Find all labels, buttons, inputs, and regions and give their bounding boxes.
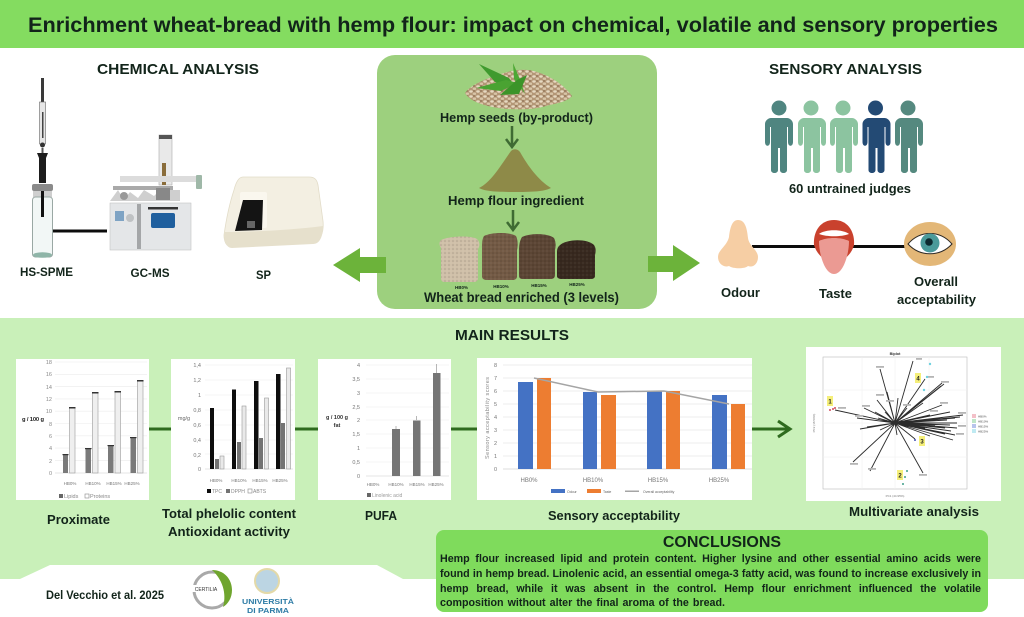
chart: sensory acceptability: Overall acceptability [643,490,675,494]
chart: proximate: 2 [49,459,52,465]
chart: total phenolic content and antioxidant activity: mg/g [178,416,190,422]
chart: proximate: HB10% [85,481,101,486]
connectors between charts [149,421,790,437]
label: multivariate analysis: Multivariate analysis [849,505,979,519]
bread: HB25% [557,240,596,287]
chart: PUFA linolenic acid: HB10% [388,482,404,487]
biplot cluster labels: 1 [828,400,832,406]
logo: Università di Parma: UNIVERSITÀ [242,597,294,606]
chart: proximate: 8 [49,422,52,428]
chart: total phenolic content and antioxidant activity: HB15% [252,478,268,483]
label: hemp seeds: Hemp seeds (by-product) [440,110,593,125]
chart: proximate: 0 [49,471,52,477]
chart: sensory acceptability [477,358,752,500]
chart: proximate: 18 [46,360,52,366]
chart: proximate: Proteins [90,494,110,500]
heading: chemical analysis: CHEMICAL ANALYSIS [97,61,259,78]
arrow: seeds to flour [506,126,518,147]
chart: proximate: 16 [46,372,52,378]
chart: sensory acceptability: 1 [494,454,497,460]
chart: sensory acceptability: 2 [494,441,497,447]
chart: PUFA linolenic acid: 1,5 [352,432,360,438]
chart: proximate: HB15% [106,481,122,486]
bread: HB15%: HB15% [531,283,547,288]
chart: total phenolic content and antioxidant activity: 0,2 [193,453,201,459]
chart: multivariate biplot: Biplot [890,352,901,356]
icon: GC-MS instrument [110,135,202,250]
label: proximate: Proximate [47,513,110,527]
heading: main results: MAIN RESULTS [455,327,569,344]
chart: total phenolic content and antioxidant activity: 0 [198,467,201,473]
biplot legend: HB25% [978,430,989,434]
title banner: Enrichment wheat-bread with hemp flour: impact on chemical, volatile and sensory properties [28,14,998,37]
chart: multivariate biplot: PC2 (18.50%) [812,414,816,432]
connector: vial to GC-MS [53,230,107,232]
label: overall acceptability [897,275,976,307]
panel: conclusions [436,530,988,612]
arrow: flour to bread [507,210,519,230]
label: odour: Odour [721,286,760,300]
chart: total phenolic content and antioxidant activity: 0,4 [193,438,201,444]
logo: research group [191,570,232,608]
chart: PUFA linolenic acid: 3,5 [352,377,360,383]
panel: conclusions: hemp bread, while it was absent in the control. Hemp flour enrichment influenced the volatile [440,583,981,595]
chart: PUFA linolenic acid: 0 [357,474,360,480]
chart: PUFA linolenic acid: 2,5 [352,405,360,411]
chart: PUFA linolenic acid: 1 [357,446,360,452]
label: sensory acceptability: Sensory acceptability [548,509,680,523]
label: total phenolic content and antioxidant activity: Total phelolic content [162,507,297,521]
bread: HB10%: HB10% [493,284,509,289]
chart: total phenolic content and antioxidant activity: DPPH [231,489,245,495]
chart: proximate: 14 [46,385,52,391]
chart: proximate: 10 [46,409,52,415]
chart: total phenolic content and antioxidant activity: HB25% [272,478,288,483]
chart: PUFA linolenic acid: Linolenic acid [372,493,403,499]
label: PUFA: PUFA [365,509,397,523]
icon: nose [718,220,758,268]
label: SP: SP [256,268,271,282]
panel: conclusions: composition without alter the final aroma of the bread. [440,597,725,609]
biplot cluster labels: 2 [898,474,902,480]
chart: sensory acceptability: Odour [567,490,578,494]
logo: Università di Parma: DI PARMA [247,608,289,615]
chart: PUFA linolenic acid: HB25% [428,482,444,487]
icon: spectrophotometer [224,177,323,248]
arrow: right to sensory analysis [648,245,700,281]
chart: PUFA linolenic acid: 3 [357,391,360,397]
biplot cluster labels [827,373,925,480]
bread: HB0%: HB0% [455,285,468,290]
chart: sensory acceptability: 4 [494,415,497,421]
icon: HS-SPME vial and syringe [32,78,53,258]
biplot legend: HB10% [978,420,989,424]
icon: hemp seeds and leaves [465,63,572,109]
panel: hemp ingredient flow [377,55,657,309]
label: overall acceptability: Overall [914,275,958,289]
citation: Del Vecchio et al. 2025 [46,590,165,602]
biplot legend [972,414,989,434]
biplot cluster labels: 4 [916,376,920,382]
chart: total phenolic content and antioxidant activity: 0,8 [193,408,201,414]
biplot legend: HB15% [978,424,989,428]
chart: PUFA linolenic acid: HB15% [409,482,425,487]
chart: total phenolic content and antioxidant activity: HB10% [231,478,247,483]
chart: sensory acceptability: HB15% [648,478,669,484]
panel: conclusions: CONCLUSIONS [663,534,781,551]
bread: HB10% [482,233,518,289]
chart: proximate: HB0% [64,481,76,486]
chart: PUFA linolenic acid: fat [334,423,341,429]
biplot legend: HB0% [978,414,987,418]
logo: research group: CERTILIA [195,587,218,593]
biplot cluster labels: 3 [920,440,924,446]
chart: PUFA linolenic acid: 0,5 [352,460,360,466]
chart: sensory acceptability: 6 [494,389,497,395]
chart: total phenolic content and antioxidant activity: 1,4 [193,363,201,369]
chart: total phenolic content and antioxidant activity: TPC [212,489,222,495]
chart: total phenolic content and antioxidant activity: ABTS [253,489,267,495]
label: GC-MS: GC-MS [130,266,170,280]
chart: sensory acceptability: 3 [494,428,497,434]
chart: sensory acceptability: Sensory acceptability scores [485,377,491,459]
chart: sensory acceptability: 0 [494,467,497,473]
bread: HB25%: HB25% [569,282,585,287]
chart: sensory acceptability: 7 [494,376,497,382]
chart: proximate: 4 [49,446,52,452]
label: total phenolic content and antioxidant activity [162,507,297,539]
icon: five judges [765,100,923,173]
chart: sensory acceptability: HB10% [583,478,604,484]
chart: sensory acceptability: 5 [494,402,497,408]
label: 60 untrained judges: 60 untrained judges [789,182,911,196]
panel: conclusions: found in hemp bread. Linolenic acid, an essential omega-3 fatty acid, was found to increase exclusively in [440,568,981,580]
bread: HB15% [519,234,556,288]
chart: PUFA linolenic acid: 4 [357,363,360,369]
chart: multivariate biplot: PC1 (44.95%) [886,494,904,498]
chart: sensory acceptability: 8 [494,363,497,369]
chart: proximate: g / 100 g [22,417,44,423]
chart: multivariate biplot [806,347,1001,501]
chart: total phenolic content and antioxidant activity: 0,6 [193,423,201,429]
chart: total phenolic content and antioxidant activity: 1 [198,393,201,399]
chart: proximate: HB25% [124,481,140,486]
chart: PUFA linolenic acid: HB0% [367,482,379,487]
chart: total phenolic content and antioxidant activity: HB0% [210,478,222,483]
label: hemp flour: Hemp flour ingredient [448,193,585,208]
icon: mouth and tongue [814,220,854,274]
connector: senses line [752,245,908,248]
chart: proximate: Lipids [64,494,79,500]
bread: HB0% [440,236,479,290]
chart: proximate: 12 [46,397,52,403]
chart: sensory acceptability: Taste [603,490,611,494]
label: total phenolic content and antioxidant activity: Antioxidant activity [168,525,290,539]
heading: sensory analysis: SENSORY ANALYSIS [769,61,922,78]
logo: Università di Parma [242,569,294,615]
chart: PUFA linolenic acid: 2 [357,418,360,424]
icon: flour pile [479,149,551,192]
chart: total phenolic content and antioxidant activity: 1,2 [193,378,201,384]
chart: proximate [16,359,149,500]
chart: proximate: 6 [49,434,52,440]
label: wheat bread: Wheat bread enriched (3 levels) [424,290,619,305]
chart: PUFA linolenic acid [318,359,451,500]
arrow: left to chemical analysis [333,248,386,282]
label: taste: Taste [819,287,852,301]
chart: total phenolic content and antioxidant activity [171,359,295,500]
chart: PUFA linolenic acid: g / 100 g [326,415,348,421]
label: HS-SPME: HS-SPME [20,265,73,279]
chart: sensory acceptability: HB25% [709,478,730,484]
title banner [0,0,1024,48]
icon: eye [904,222,956,266]
chart: sensory acceptability: HB0% [520,478,538,484]
label: overall acceptability: acceptability [897,293,976,307]
panel: conclusions: Hemp flour increased lipid and protein content. Higher lysine and other essential amino acids were [440,553,981,565]
panel: main results background [0,318,1024,579]
